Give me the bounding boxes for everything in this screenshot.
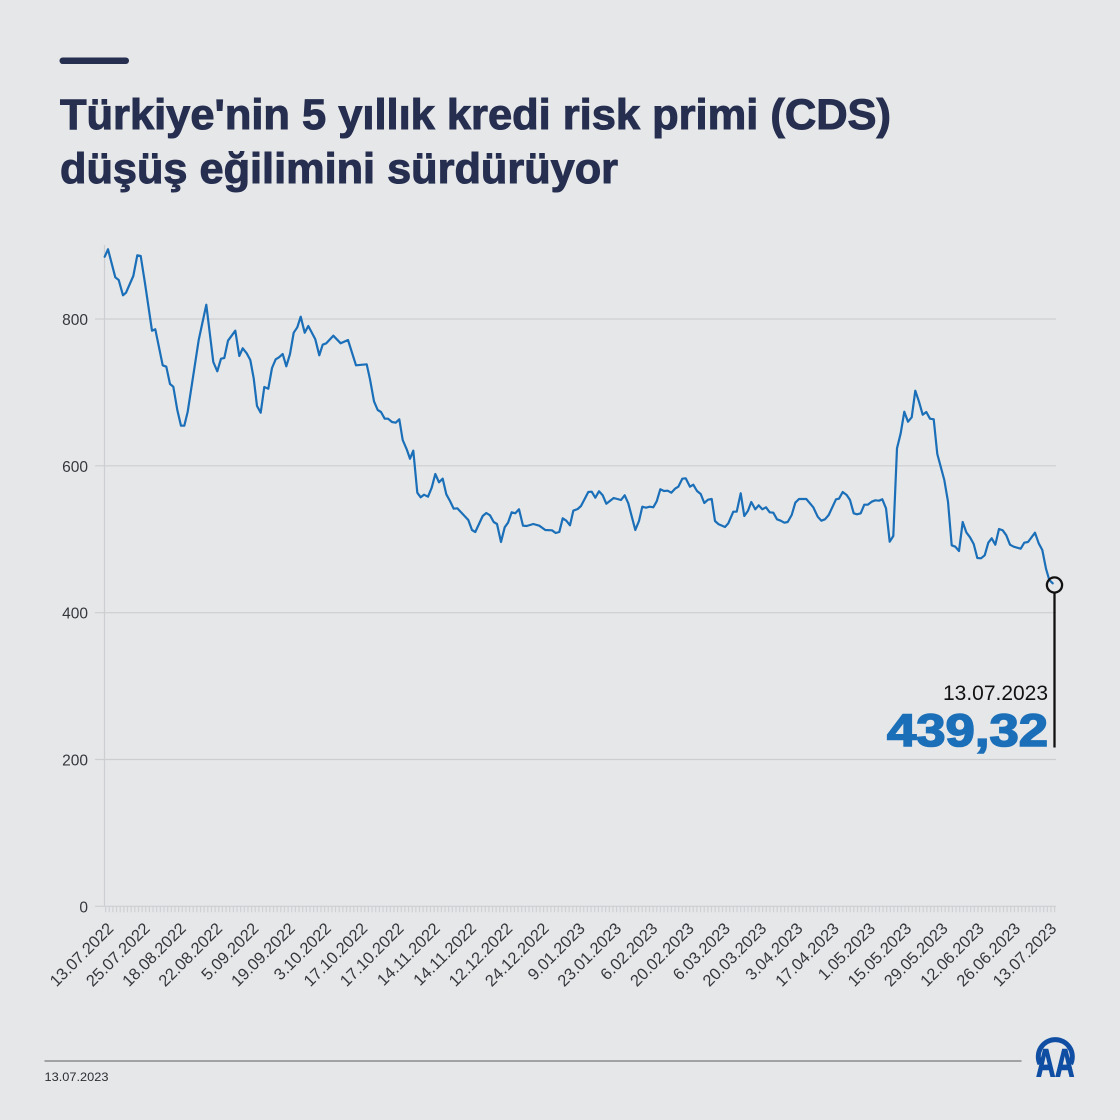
x axis labels: 14.11.2022	[374, 920, 444, 989]
y axis labels: 200	[62, 752, 88, 770]
x axis labels: 1.05.2023	[815, 920, 879, 984]
x axis labels: 14.11.2022	[410, 920, 480, 989]
x axis labels: 20.02.2023	[627, 920, 698, 990]
gridlines	[95, 245, 1056, 906]
x axis labels: 22.08.2022	[155, 920, 226, 990]
title: Türkiye'nin 5 yıllık kredi risk primi (CDS)	[60, 91, 891, 139]
x axis labels: 13.07.2022	[47, 920, 117, 990]
x axis labels: 25.07.2022	[83, 920, 154, 990]
footer date: 13.07.2023	[44, 1072, 108, 1084]
callout date: 13.07.2023	[943, 682, 1048, 705]
y axis labels: 600	[62, 459, 88, 476]
end point marker and leader	[1047, 577, 1062, 748]
y axis labels: 0	[79, 900, 88, 916]
x axis labels: 12.12.2022	[446, 920, 516, 990]
line chart: CDS series	[105, 249, 1053, 583]
x axis labels: 6.03.2023	[670, 920, 734, 984]
x axis ticks	[105, 907, 1056, 912]
title accent bar	[60, 58, 129, 64]
x axis labels: 18.08.2022	[119, 920, 190, 990]
title: düşüş eğilimini sürdürüyor	[60, 145, 618, 193]
x axis labels: 17.10.2022	[337, 920, 408, 990]
x axis labels: 12.06.2023	[917, 920, 988, 990]
x axis labels: 19.09.2022	[228, 920, 299, 990]
x axis labels	[47, 920, 1060, 990]
x axis labels: 3.04.2023	[742, 920, 807, 984]
footer rule	[44, 1060, 1022, 1062]
title	[60, 91, 891, 193]
x axis labels: 17.04.2023	[772, 920, 843, 990]
x axis labels: 3.10.2022	[271, 920, 335, 984]
x axis labels: 24.12.2022	[482, 920, 553, 990]
x axis labels: 15.05.2023	[845, 920, 915, 990]
y axis labels: 800	[62, 312, 88, 329]
callout value: 439,32	[887, 705, 1048, 756]
x axis labels: 26.06.2023	[953, 920, 1024, 990]
x axis labels: 13.07.2023	[990, 920, 1060, 990]
x axis labels: 9.01.2023	[525, 920, 589, 984]
x axis labels: 20.03.2023	[699, 920, 770, 990]
y axis labels: 400	[62, 606, 88, 622]
logo: AA: AA	[1036, 1042, 1074, 1086]
x axis labels: 29.05.2023	[881, 920, 952, 990]
x axis labels: 17.10.2022	[300, 920, 371, 990]
x axis labels: 6.02.2023	[597, 920, 661, 984]
y axis labels	[62, 312, 88, 916]
x axis labels: 5.09.2022	[198, 920, 262, 984]
logo: AA	[1036, 1040, 1074, 1086]
x axis labels: 23.01.2023	[554, 920, 625, 990]
